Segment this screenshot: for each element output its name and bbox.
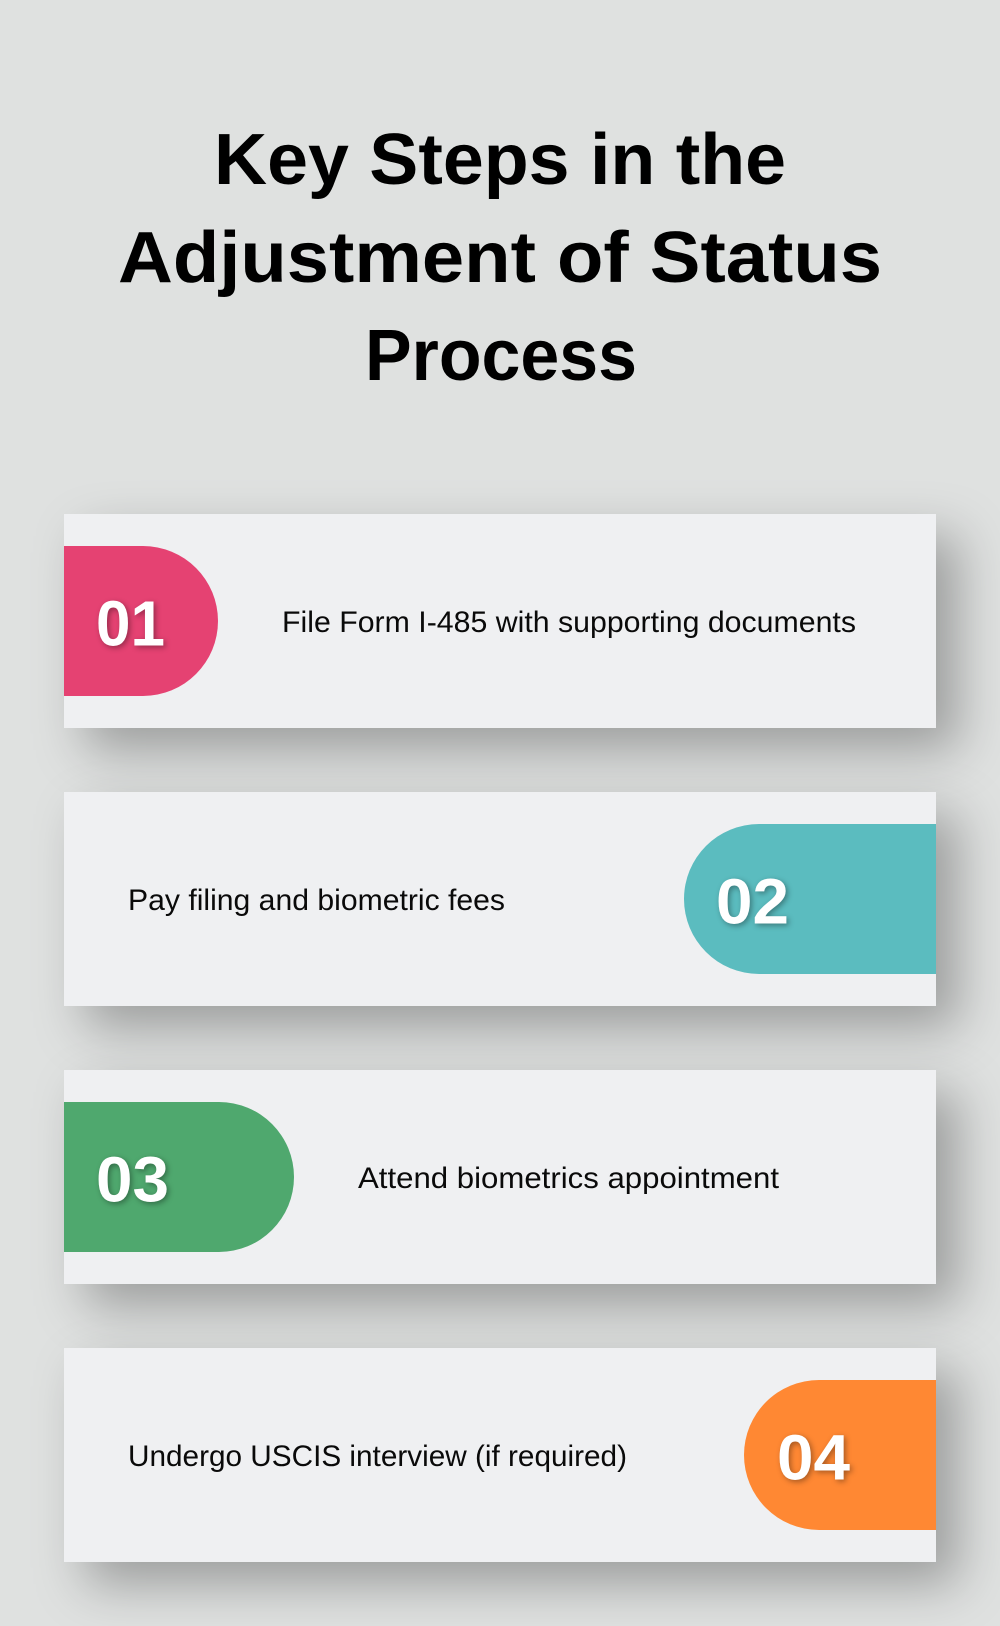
badge: step 3 number: 03 [96, 1144, 169, 1216]
panel: step 3 [64, 1070, 936, 1284]
badge: step 2 number [684, 824, 936, 974]
panel: step 2 [64, 792, 936, 1006]
text: step 3 description: Attend biometrics appointment [358, 1162, 780, 1195]
text: step 4 description: Undergo USCIS interview (if required) [128, 1440, 627, 1473]
title: Adjustment of Status [118, 218, 882, 298]
badge: step 4 number: 04 [777, 1422, 850, 1494]
title: Key Steps in the [214, 120, 786, 200]
text: step 1 description: File Form I-485 with supporting documents [282, 606, 856, 639]
panel: step 1 [64, 514, 936, 728]
title: Process [365, 316, 637, 396]
badge: step 2 number: 02 [716, 866, 789, 938]
badge: step 3 number [64, 1102, 294, 1252]
text: step 2 description: Pay filing and biometric fees [128, 884, 505, 917]
title [118, 120, 882, 396]
badge: step 1 number: 01 [96, 588, 165, 660]
panel: step 4 [64, 1348, 936, 1562]
badge: step 1 number [64, 546, 218, 696]
badge: step 4 number [744, 1380, 936, 1530]
